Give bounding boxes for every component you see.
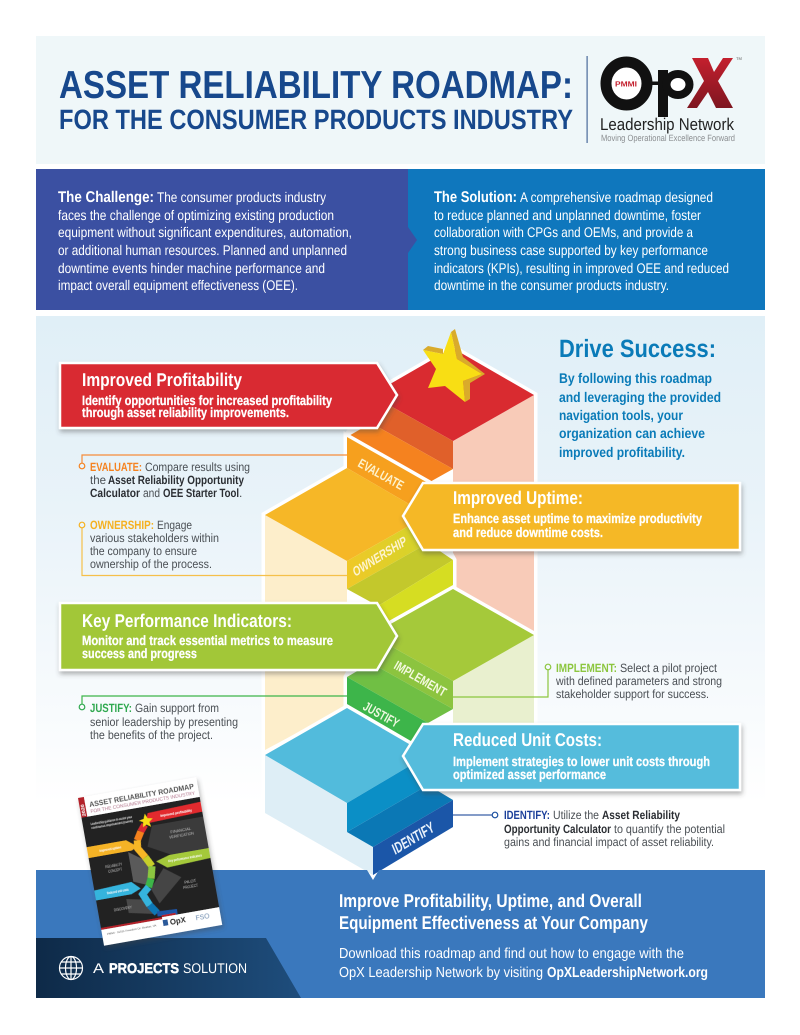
brochure cover image: [78, 777, 222, 946]
OpX logo: PMMI: [615, 80, 637, 88]
text block: drive success: organization can achieve: [559, 425, 705, 441]
annotation: ownership: the company to ensure: [90, 544, 197, 558]
annotation: identify: Utilize the: [553, 808, 599, 822]
OpX logo: [586, 56, 742, 143]
callout: improved uptime: Enhance asset uptime to maximize productivity: [453, 511, 702, 526]
footer text: OpXLeadershipNetwork.org: [547, 965, 708, 981]
step label: justify: JUSTIFY: [361, 699, 402, 731]
panel: the solution: A comprehensive roadmap designed: [520, 189, 713, 205]
OpX logo: TM: [736, 56, 742, 61]
projects solution badge: A: [93, 960, 105, 976]
brochure cover image: 2020: [80, 803, 87, 817]
brochure cover image: PILOT: [184, 878, 197, 885]
callout: improved profitability: [60, 363, 397, 428]
panel: the challenge: or additional human resources. Planned and unplanned: [58, 242, 347, 258]
title: [59, 64, 573, 135]
panel: the solution: to reduce planned and unplanned downtime, foster: [434, 207, 701, 223]
brochure cover image: Improved uptime: [99, 845, 122, 853]
panel: the solution: [408, 169, 765, 310]
annotation: identify: [453, 808, 725, 849]
annotation: implement: [453, 661, 722, 701]
callout: improved profitability: Identify opportunities for increased profitability: [82, 393, 332, 408]
text block: drive success: [559, 335, 721, 460]
panel: the challenge: The consumer products industry: [157, 189, 326, 205]
footer text: [339, 946, 708, 981]
staircase: [265, 329, 534, 875]
annotation: evaluate: OEE Starter Tool: [163, 486, 239, 500]
brochure cover image: continuous improvement journey: [91, 819, 133, 830]
panel: the challenge: equipment without significant expenditures, automation,: [58, 224, 352, 240]
title: FOR THE CONSUMER PRODUCTS INDUSTRY: [59, 104, 573, 135]
annotation: identify: IDENTIFY:: [504, 808, 550, 822]
annotation: implement: stakeholder support for success.: [556, 687, 709, 701]
callout: reduced unit costs: [403, 724, 740, 790]
stage: key performance indicators steps: [347, 589, 534, 755]
panel: the solution: collaboration with CPGs and OEMs, and provide a: [434, 224, 693, 240]
stage: reduced unit costs steps: [265, 708, 453, 875]
annotation: evaluate: the: [90, 473, 106, 487]
panel: the challenge: The Challenge:: [58, 189, 154, 206]
brochure cover image: ASSET RELIABILITY ROADMAP: [89, 782, 194, 809]
brochure cover image: OpX: [169, 915, 187, 927]
icon: globe: [60, 956, 82, 980]
brochure cover image: RELIABILITY: [105, 861, 123, 869]
annotation: evaluate: EVALUATE:: [90, 460, 142, 474]
projects solution badge: [36, 938, 301, 998]
projects solution badge: SOLUTION: [183, 960, 247, 976]
icon: star: [423, 329, 485, 402]
annotation: implement: with defined parameters and strong: [555, 674, 722, 688]
footer heading: Equipment Effectiveness at Your Company: [339, 912, 649, 933]
text block: drive success: navigation tools, your: [559, 407, 683, 423]
callout: improved uptime: [403, 483, 740, 550]
text block: drive success: and leveraging the provided: [559, 389, 721, 405]
annotation: ownership: [79, 518, 347, 576]
brochure cover image: Key performance indicators: [168, 853, 202, 863]
annotation: evaluate: Asset Reliability Opportunity: [108, 473, 244, 487]
brochure cover image: VERIFICATION: [169, 830, 194, 840]
callout: improved uptime: and reduce downtime costs.: [453, 525, 603, 540]
brochure cover image: DISCOVERY: [114, 904, 132, 912]
stage: improved uptime steps: [265, 437, 453, 750]
annotation: justify: JUSTIFY:: [90, 701, 132, 715]
annotation: justify: senior leadership by presenting: [90, 715, 238, 729]
callout: reduced unit costs: optimized asset performance: [453, 767, 606, 782]
annotation: identify: to quantify the potential: [614, 822, 725, 836]
roadmap background panel: [36, 316, 765, 870]
annotation: implement: Select a pilot project: [620, 661, 718, 675]
annotation: identify: Opportunity Calculator: [504, 822, 611, 836]
annotation: ownership: OWNERSHIP:: [90, 518, 154, 532]
annotation: evaluate: .: [239, 486, 242, 500]
projects solution badge: PROJECTS: [109, 960, 179, 976]
panel: the challenge: faces the challenge of optimizing existing production: [58, 207, 334, 223]
brochure cover image: CONCEPT: [108, 866, 123, 874]
panel: the challenge: [36, 169, 417, 310]
brochure cover image: PROJECT: [183, 882, 199, 890]
panel: the solution: downtime in the consumer products industry.: [434, 277, 669, 293]
panel: the solution: indicators (KPIs), resulting in improved OEE and reduced: [434, 260, 729, 276]
footer heading: Improve Profitability, Uptime, and Overall: [339, 890, 642, 911]
callout: key performance indicators: Key Performance Indicators:: [82, 610, 292, 631]
step label: identify: IDENTIFY: [390, 819, 437, 859]
text block: drive success: Drive Success:: [559, 335, 716, 363]
annotation: ownership: various stakeholders within: [90, 531, 219, 545]
text block: drive success: By following this roadmap: [559, 370, 712, 386]
brochure cover image: FOR THE CONSUMER PRODUCTS INDUSTRY: [90, 791, 196, 815]
OpX logo: Moving Operational Excellence Forward: [601, 133, 735, 143]
annotation: ownership: ownership of the process.: [90, 557, 212, 571]
panel: the solution: The Solution:: [434, 189, 517, 206]
annotation: justify: the benefits of the project.: [90, 728, 213, 742]
callout: key performance indicators: [60, 603, 397, 670]
callout: key performance indicators: success and progress: [82, 646, 197, 661]
brochure cover image: FSO: [195, 913, 211, 922]
callout: reduced unit costs: Reduced Unit Costs:: [453, 729, 602, 750]
text block: drive success: improved profitability.: [559, 444, 685, 460]
annotation: evaluate: Calculator: [90, 486, 140, 500]
callout: improved profitability: Improved Profitability: [82, 369, 243, 390]
annotation: identify: Asset Reliability: [602, 808, 680, 822]
step label: ownership: OWNERSHIP: [351, 532, 409, 580]
annotation: evaluate: [79, 455, 347, 500]
annotation: evaluate: and: [143, 486, 160, 500]
title: ASSET RELIABILITY ROADMAP:: [59, 64, 573, 107]
brochure cover image: Improved profitability: [160, 808, 192, 818]
footer band: [36, 870, 765, 998]
annotation: evaluate: Compare results using: [145, 460, 250, 474]
step label: evaluate: EVALUATE: [356, 456, 407, 493]
annotation: ownership: Engage: [157, 518, 192, 532]
brochure cover image: Leadership guidance to assist your: [90, 815, 133, 826]
annotation: justify: [79, 696, 347, 742]
brochure cover image: PMMI · 11911 Freedom Dr. Reston, VA: [107, 923, 157, 936]
step label: implement: IMPLEMENT: [392, 658, 449, 700]
footer text: Download this roadmap and find out how to engage with the: [339, 946, 684, 962]
annotation: justify: Gain support from: [135, 701, 219, 715]
callout: improved profitability: through asset reliability improvements.: [82, 405, 289, 420]
stage: improved profitability steps: [347, 348, 534, 640]
panel: the challenge: downtime events hinder machine performance and: [58, 260, 325, 276]
footer text: OpX Leadership Network by visiting: [339, 965, 543, 981]
brochure cover image: FINANCIAL: [170, 826, 192, 834]
annotation: implement: IMPLEMENT:: [556, 661, 617, 675]
panel: the challenge: impact overall equipment effectiveness (OEE).: [58, 277, 298, 293]
panel: the solution: strong business case supported by key performance: [434, 242, 708, 258]
brochure cover image: Reduced unit costs: [107, 888, 129, 895]
footer heading: [339, 890, 649, 933]
callout: reduced unit costs: Implement strategies to lower unit costs through: [453, 754, 710, 769]
annotation: identify: gains and financial impact of asset reliability.: [504, 835, 714, 849]
header panel: [36, 36, 765, 164]
callout: key performance indicators: Monitor and track essential metrics to measure: [82, 633, 333, 648]
OpX logo: Leadership Network: [600, 115, 734, 134]
callout: improved uptime: Improved Uptime:: [453, 487, 583, 508]
